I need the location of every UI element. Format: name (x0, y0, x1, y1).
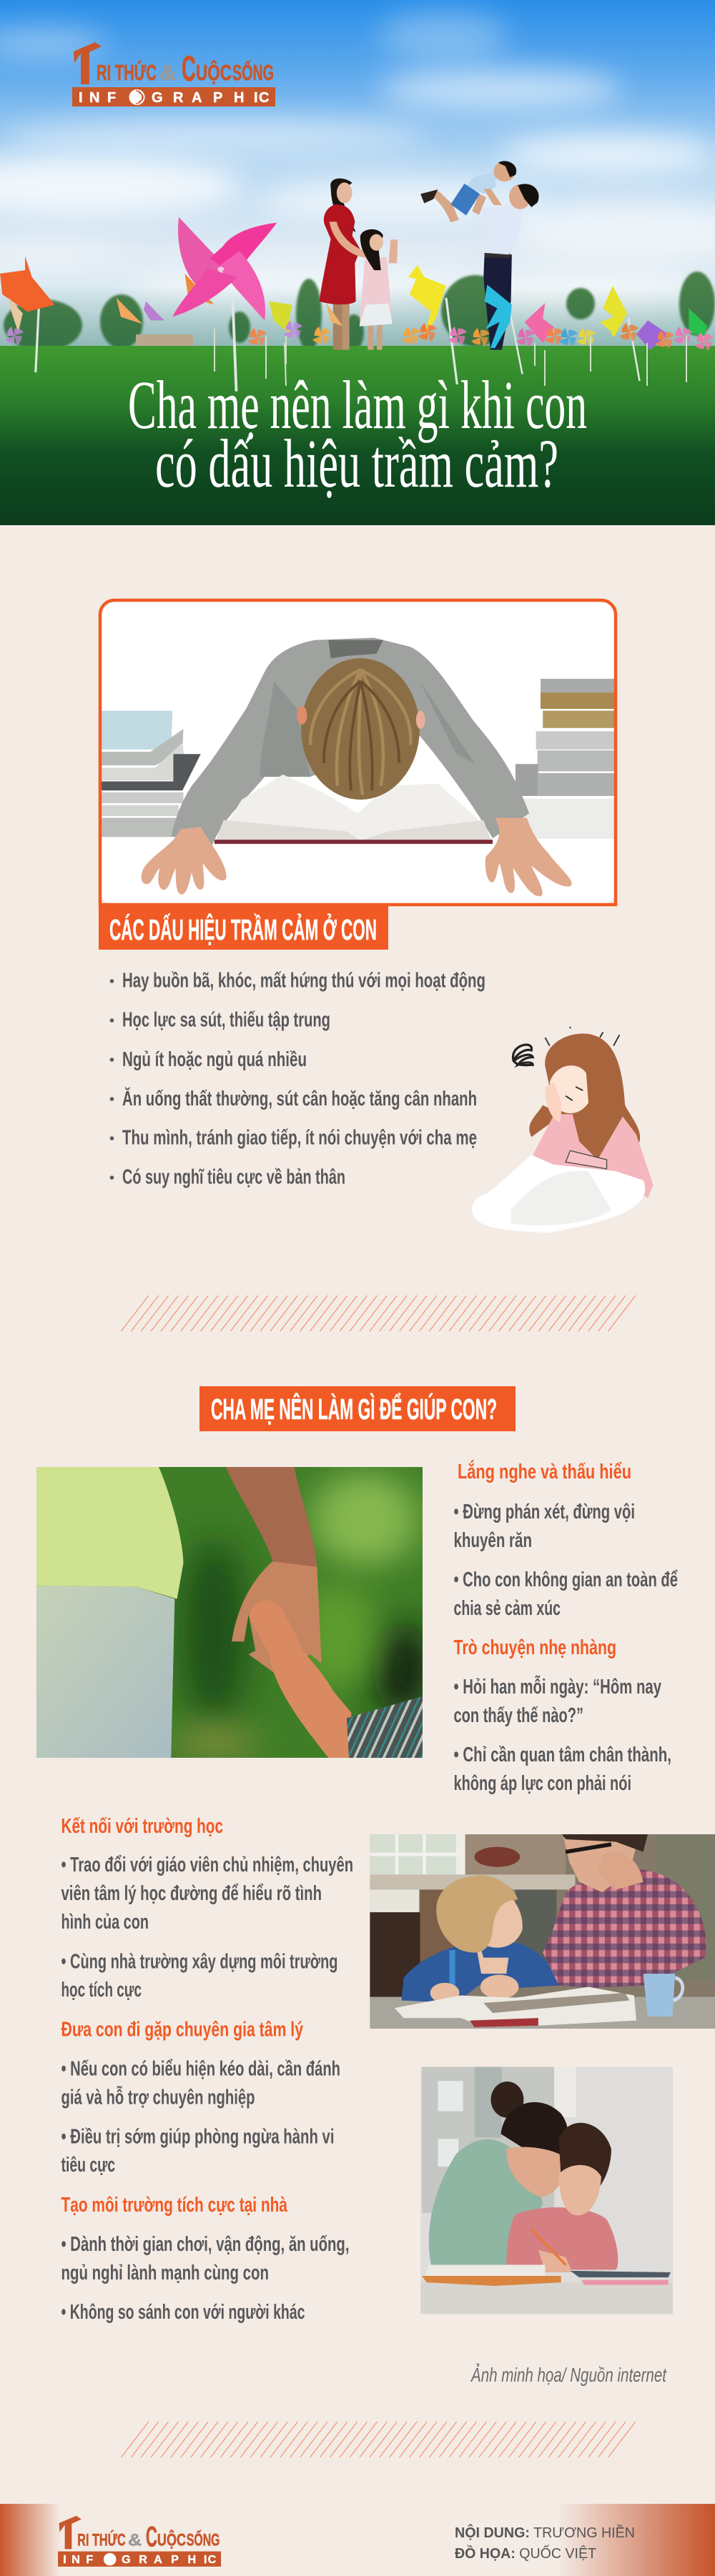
credits (455, 2524, 635, 2562)
open book (229, 775, 478, 840)
list: expert: • Điều trị sớm giúp phòng ngừa hành vi (61, 2126, 335, 2149)
list: talk: không áp lực con phải nói (453, 1772, 631, 1795)
daughter (360, 229, 398, 350)
list: home: • Không so sánh con với người khác (61, 2301, 305, 2324)
books (424, 2264, 545, 2279)
photo: father and son studying (370, 1834, 715, 2029)
mug (644, 1974, 675, 2016)
footer logo: & (128, 2531, 142, 2550)
lifted son (420, 161, 516, 222)
logo wordmark: UỘC (196, 59, 232, 85)
horizon trees (4, 272, 715, 351)
list: school: • Trao đổi với giáo viên chủ nhiệm, chuyên (61, 1854, 353, 1876)
heading: home: Tạo môi trường tích cực tại nhà (61, 2194, 288, 2217)
list: talk (453, 1674, 671, 1795)
mother (429, 2082, 568, 2264)
logo globe (129, 89, 144, 105)
heading: talk: Trò chuyện nhẹ nhàng (453, 1636, 616, 1659)
list: warning signs (110, 969, 485, 1189)
list: expert: giá và hỗ trợ chuyên nghiệp (61, 2085, 255, 2109)
panel: footer (0, 2504, 715, 2576)
sky (0, 0, 715, 357)
horizon fade (0, 292, 715, 346)
list: warning signs: Thu mình, tránh giao tiếp, ít nói chuyện với cha mẹ (122, 1127, 477, 1150)
logo wordmark: RI THỨC (97, 59, 157, 85)
list: home: ngủ nghỉ lành mạnh cùng con (61, 2262, 269, 2284)
heading: expert: Đưa con đi gặp chuyên gia tâm lý (61, 2018, 303, 2041)
list: warning signs: Hay buồn bã, khóc, mất hứng thú với mọi hoạt động (122, 969, 485, 992)
footer logo: UỘC (157, 2530, 186, 2550)
list: warning signs: Ngủ ít hoặc ngủ quá nhiều (122, 1048, 307, 1071)
table (370, 1997, 715, 2029)
list: talk: con thấy thế nào?” (453, 1704, 583, 1727)
list: expert: • Nếu con có biểu hiện kéo dài, cần đánh (61, 2058, 340, 2081)
footer logo: RI THỨC (77, 2530, 126, 2550)
list: warning signs: Ăn uống thất thường, sút cân hoặc tăng cân nhanh (122, 1087, 477, 1110)
list: home: • Dành thời gian chơi, vận động, ăn uống, (61, 2233, 349, 2256)
footer logo: SỐNG (187, 2530, 220, 2550)
credits: ĐỒ HỌA: QUỐC VIỆT (455, 2545, 596, 2562)
logo (72, 42, 275, 106)
list: home (61, 2233, 349, 2324)
papers (395, 1986, 636, 2026)
buildings (136, 334, 193, 346)
heading: listen: Lắng nghe và thấu hiểu (458, 1459, 631, 1483)
heading: warning signs: CÁC DẤU HIỆU TRẦM CẢM Ở CON (109, 913, 377, 946)
list: school: học tích cực (61, 1979, 142, 2001)
list: school: • Cùng nhà trường xây dựng môi trường (61, 1950, 337, 1973)
child arm (249, 1600, 351, 1758)
list: school: hình của con (61, 1911, 149, 1934)
illustration: sad girl (472, 1027, 654, 1233)
footer background (0, 2504, 715, 2576)
right hand (485, 818, 572, 896)
list: expert: tiêu cực (61, 2154, 115, 2177)
footer logo: C (146, 2522, 157, 2552)
father (472, 184, 539, 350)
daughter (506, 2123, 618, 2272)
footer logo: INFOGRAPHIC (63, 2554, 217, 2566)
list: warning signs: Học lực sa sút, thiếu tập trung (122, 1009, 330, 1032)
heading: what parents should do: CHA MẸ NÊN LÀM GÌ ĐỂ GIÚP CON? (211, 1392, 497, 1426)
panel: school, expert, home (61, 1815, 353, 2324)
adult hand (232, 1561, 322, 1673)
father (543, 1834, 706, 1988)
shirt (36, 1467, 183, 1599)
list: school: viên tâm lý học đường để hiểu rõ tình (61, 1882, 322, 1905)
orange pinwheel (0, 257, 55, 372)
striped sleeve (347, 1696, 423, 1758)
panel: listen and talk (453, 1459, 678, 1795)
panel: warning signs (99, 600, 654, 1233)
heading: school: Kết nối với trường học (61, 1815, 223, 1838)
divider (119, 1296, 637, 1331)
son (401, 1876, 560, 2003)
logo infographic label: INFOGRAPHIC (79, 90, 269, 106)
mother (320, 179, 372, 350)
heading: what parents should do (199, 1386, 516, 1431)
family (0, 161, 707, 392)
photo: holding hands (36, 1467, 429, 1760)
logo wordmark: & (159, 60, 177, 85)
logo T mark (74, 42, 102, 84)
heading: warning signs (99, 904, 388, 950)
footer logo (58, 2516, 221, 2567)
left book stack (102, 711, 201, 837)
table (420, 2282, 674, 2314)
hair (301, 658, 420, 800)
logo wordmark (97, 56, 273, 84)
yellow pinwheel (408, 265, 457, 384)
logo wordmark: C (182, 49, 196, 89)
right yellow pinwheel (600, 286, 639, 381)
pinwheel sticks in grass (214, 329, 686, 386)
pink and green right pinwheels (117, 298, 707, 350)
title (129, 380, 586, 498)
list: listen: • Đừng phán xét, đừng vội (453, 1501, 635, 1523)
photo: mother and daughter (420, 2067, 674, 2314)
logo strip (72, 87, 275, 106)
list: school (61, 1854, 353, 2001)
list: listen: khuyên răn (453, 1529, 532, 1552)
hoodie (171, 638, 529, 845)
list: expert (61, 2058, 340, 2177)
clouds (0, 11, 715, 314)
list: listen (453, 1501, 678, 1620)
small pinwheels on horizon (5, 321, 714, 351)
grass (0, 346, 715, 525)
cyan pinwheel (485, 284, 523, 374)
left hand (142, 827, 227, 895)
trousers (36, 1586, 174, 1758)
credits: NỘI DUNG: TRƯƠNG HIỀN (455, 2524, 635, 2541)
photo: boy asleep on book (100, 600, 616, 905)
right book stack (516, 679, 616, 839)
divider (119, 2422, 637, 2457)
list: warning signs: Có suy nghĩ tiêu cực về bản thân (122, 1166, 345, 1189)
panel: hero photo (0, 0, 715, 525)
logo wordmark: SỐNG (232, 59, 274, 85)
adult arm (226, 1467, 317, 1574)
list: listen: chia sẻ cảm xúc (453, 1597, 561, 1620)
large pink pinwheel (172, 217, 277, 392)
